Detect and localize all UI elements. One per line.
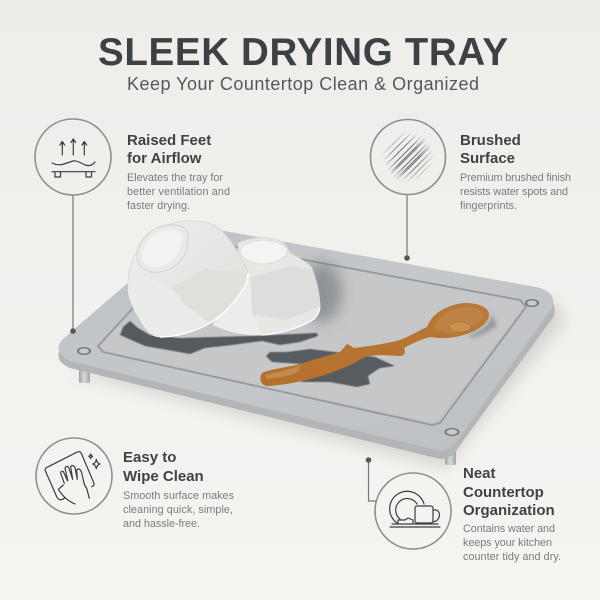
description: Contains water and <box>463 523 555 535</box>
title: SLEEK DRYING TRAY <box>98 31 508 74</box>
feature: neat countertop organization <box>366 457 561 563</box>
description: faster drying. <box>127 200 190 212</box>
description: keeps your kitchen <box>463 537 552 549</box>
feature: raised feet <box>35 119 230 334</box>
tray side edge <box>58 234 555 459</box>
connector line <box>404 195 410 261</box>
heading: Easy to <box>123 449 176 466</box>
heading: Neat <box>463 465 496 482</box>
description: Smooth surface makes <box>123 490 235 502</box>
connector line <box>366 457 376 501</box>
heading: Raised Feet <box>127 132 211 149</box>
icon: raised feet airflow <box>35 119 111 195</box>
description: fingerprints. <box>460 200 517 212</box>
icon: brushed texture <box>370 120 446 194</box>
spoon shadow <box>470 312 497 338</box>
inset groove <box>98 246 526 425</box>
wooden spoon <box>260 303 489 386</box>
icon: dishes and mug <box>375 473 451 549</box>
description: cleaning quick, simple, <box>123 504 233 516</box>
description: counter tidy and dry. <box>463 551 561 563</box>
tray feet <box>79 366 456 465</box>
feature: easy to wipe clean <box>36 438 235 530</box>
description: better ventilation and <box>127 186 230 198</box>
icon: hand wiping cloth <box>36 438 112 514</box>
water stain right <box>266 349 395 387</box>
heading: for Airflow <box>127 150 202 167</box>
shadow of bowls <box>302 262 342 322</box>
right bowl <box>213 238 320 335</box>
left bowl <box>128 221 248 337</box>
bolts <box>77 299 539 436</box>
heading: Wipe Clean <box>123 468 204 485</box>
tray top surface <box>58 228 553 451</box>
subtitle: Keep Your Countertop Clean & Organized <box>127 74 479 94</box>
tray cast shadow <box>70 300 565 468</box>
description: Premium brushed finish <box>460 172 571 184</box>
connector line <box>70 195 76 334</box>
water stain left <box>120 321 318 354</box>
heading: Surface <box>460 150 515 167</box>
inner brushed panel <box>102 249 522 422</box>
heading: Organization <box>463 502 555 519</box>
description: and hassle-free. <box>123 518 200 530</box>
heading: Brushed <box>460 132 521 149</box>
description: Elevates the tray for <box>127 172 223 184</box>
feature: brushed surface <box>370 120 571 261</box>
drying tray product <box>58 221 565 468</box>
heading: Countertop <box>463 484 544 501</box>
description: resists water spots and <box>460 186 568 198</box>
